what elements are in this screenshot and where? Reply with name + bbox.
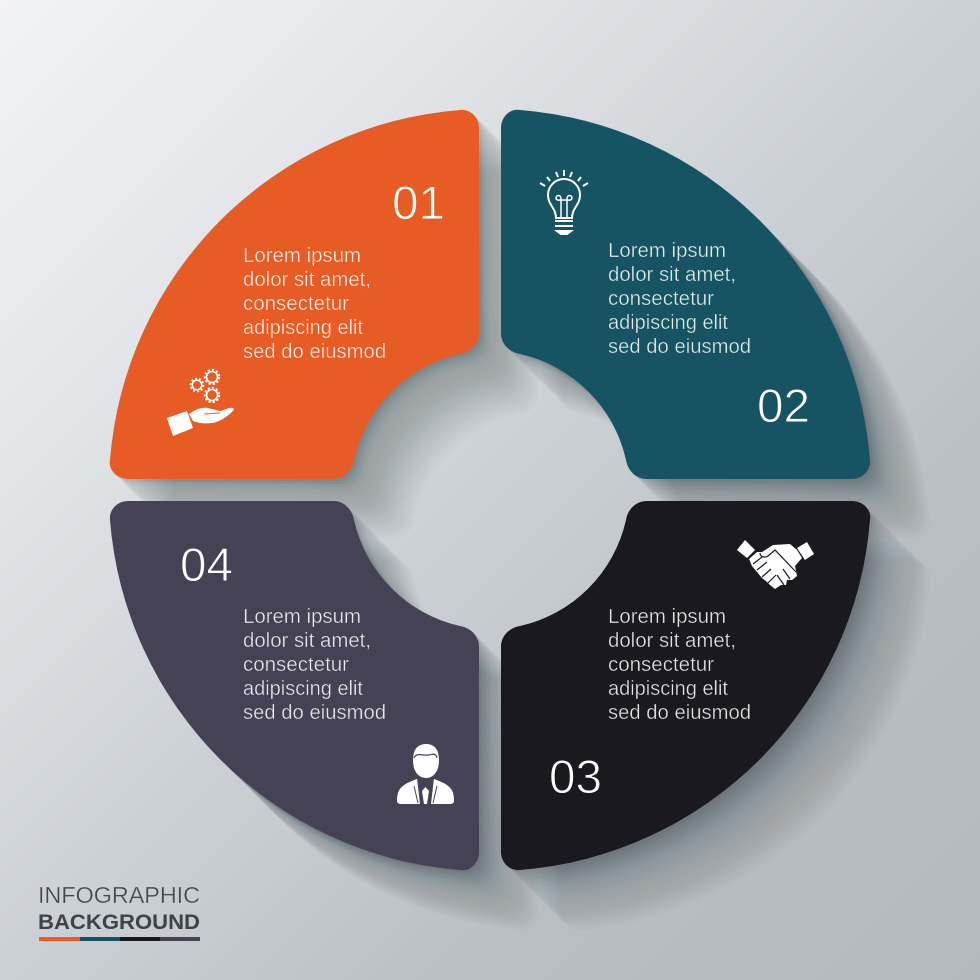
orange shape (110, 110, 479, 479)
text block 01: sed do eiusmod (243, 341, 386, 363)
logo line 1: INFOGRAPHIC (38, 882, 200, 908)
long shadows (112, 112, 930, 930)
text block 01: consectetur (243, 293, 349, 315)
icon: hand with gears (167, 370, 234, 436)
text block 04 (243, 606, 386, 724)
text block 03 (608, 606, 751, 724)
text block 03: consectetur (608, 654, 714, 676)
text block 03: sed do eiusmod (608, 702, 751, 724)
text block 02 (608, 240, 751, 358)
text block 02: adipiscing elit (608, 312, 728, 334)
text block 01: Lorem ipsum (243, 245, 361, 267)
icon: handshake (737, 540, 814, 589)
number 04: 04 (180, 538, 233, 591)
text block 02: sed do eiusmod (608, 336, 751, 358)
text block 03: Lorem ipsum (608, 606, 726, 628)
teal shape (501, 110, 870, 479)
text block 01 (243, 245, 386, 363)
text block 02: dolor sit amet, (608, 264, 736, 286)
text block 01: adipiscing elit (243, 317, 363, 339)
slate shape (110, 501, 479, 870)
text block 02: consectetur (608, 288, 714, 310)
logo line 2: BACKGROUND (38, 911, 200, 934)
text block 03: adipiscing elit (608, 678, 728, 700)
panel: segment 03 (501, 501, 870, 870)
text block 01: dolor sit amet, (243, 269, 371, 291)
panel: segment 01 (110, 110, 479, 479)
panel: segment 02 (501, 110, 870, 479)
panel: segment 04 (110, 501, 479, 870)
icon: businessman (397, 744, 454, 804)
number 01: 01 (392, 176, 445, 229)
text block 04: dolor sit amet, (243, 630, 371, 652)
number 02: 02 (757, 379, 810, 432)
number 03: 03 (549, 750, 602, 803)
color bar (39, 937, 200, 941)
icon: light bulb (540, 170, 588, 234)
text block 02: Lorem ipsum (608, 240, 726, 262)
logo: infographic background (38, 882, 200, 941)
text block 04: consectetur (243, 654, 349, 676)
text block 04: sed do eiusmod (243, 702, 386, 724)
text block 03: dolor sit amet, (608, 630, 736, 652)
text block 04: Lorem ipsum (243, 606, 361, 628)
black shape (501, 501, 870, 870)
text block 04: adipiscing elit (243, 678, 363, 700)
